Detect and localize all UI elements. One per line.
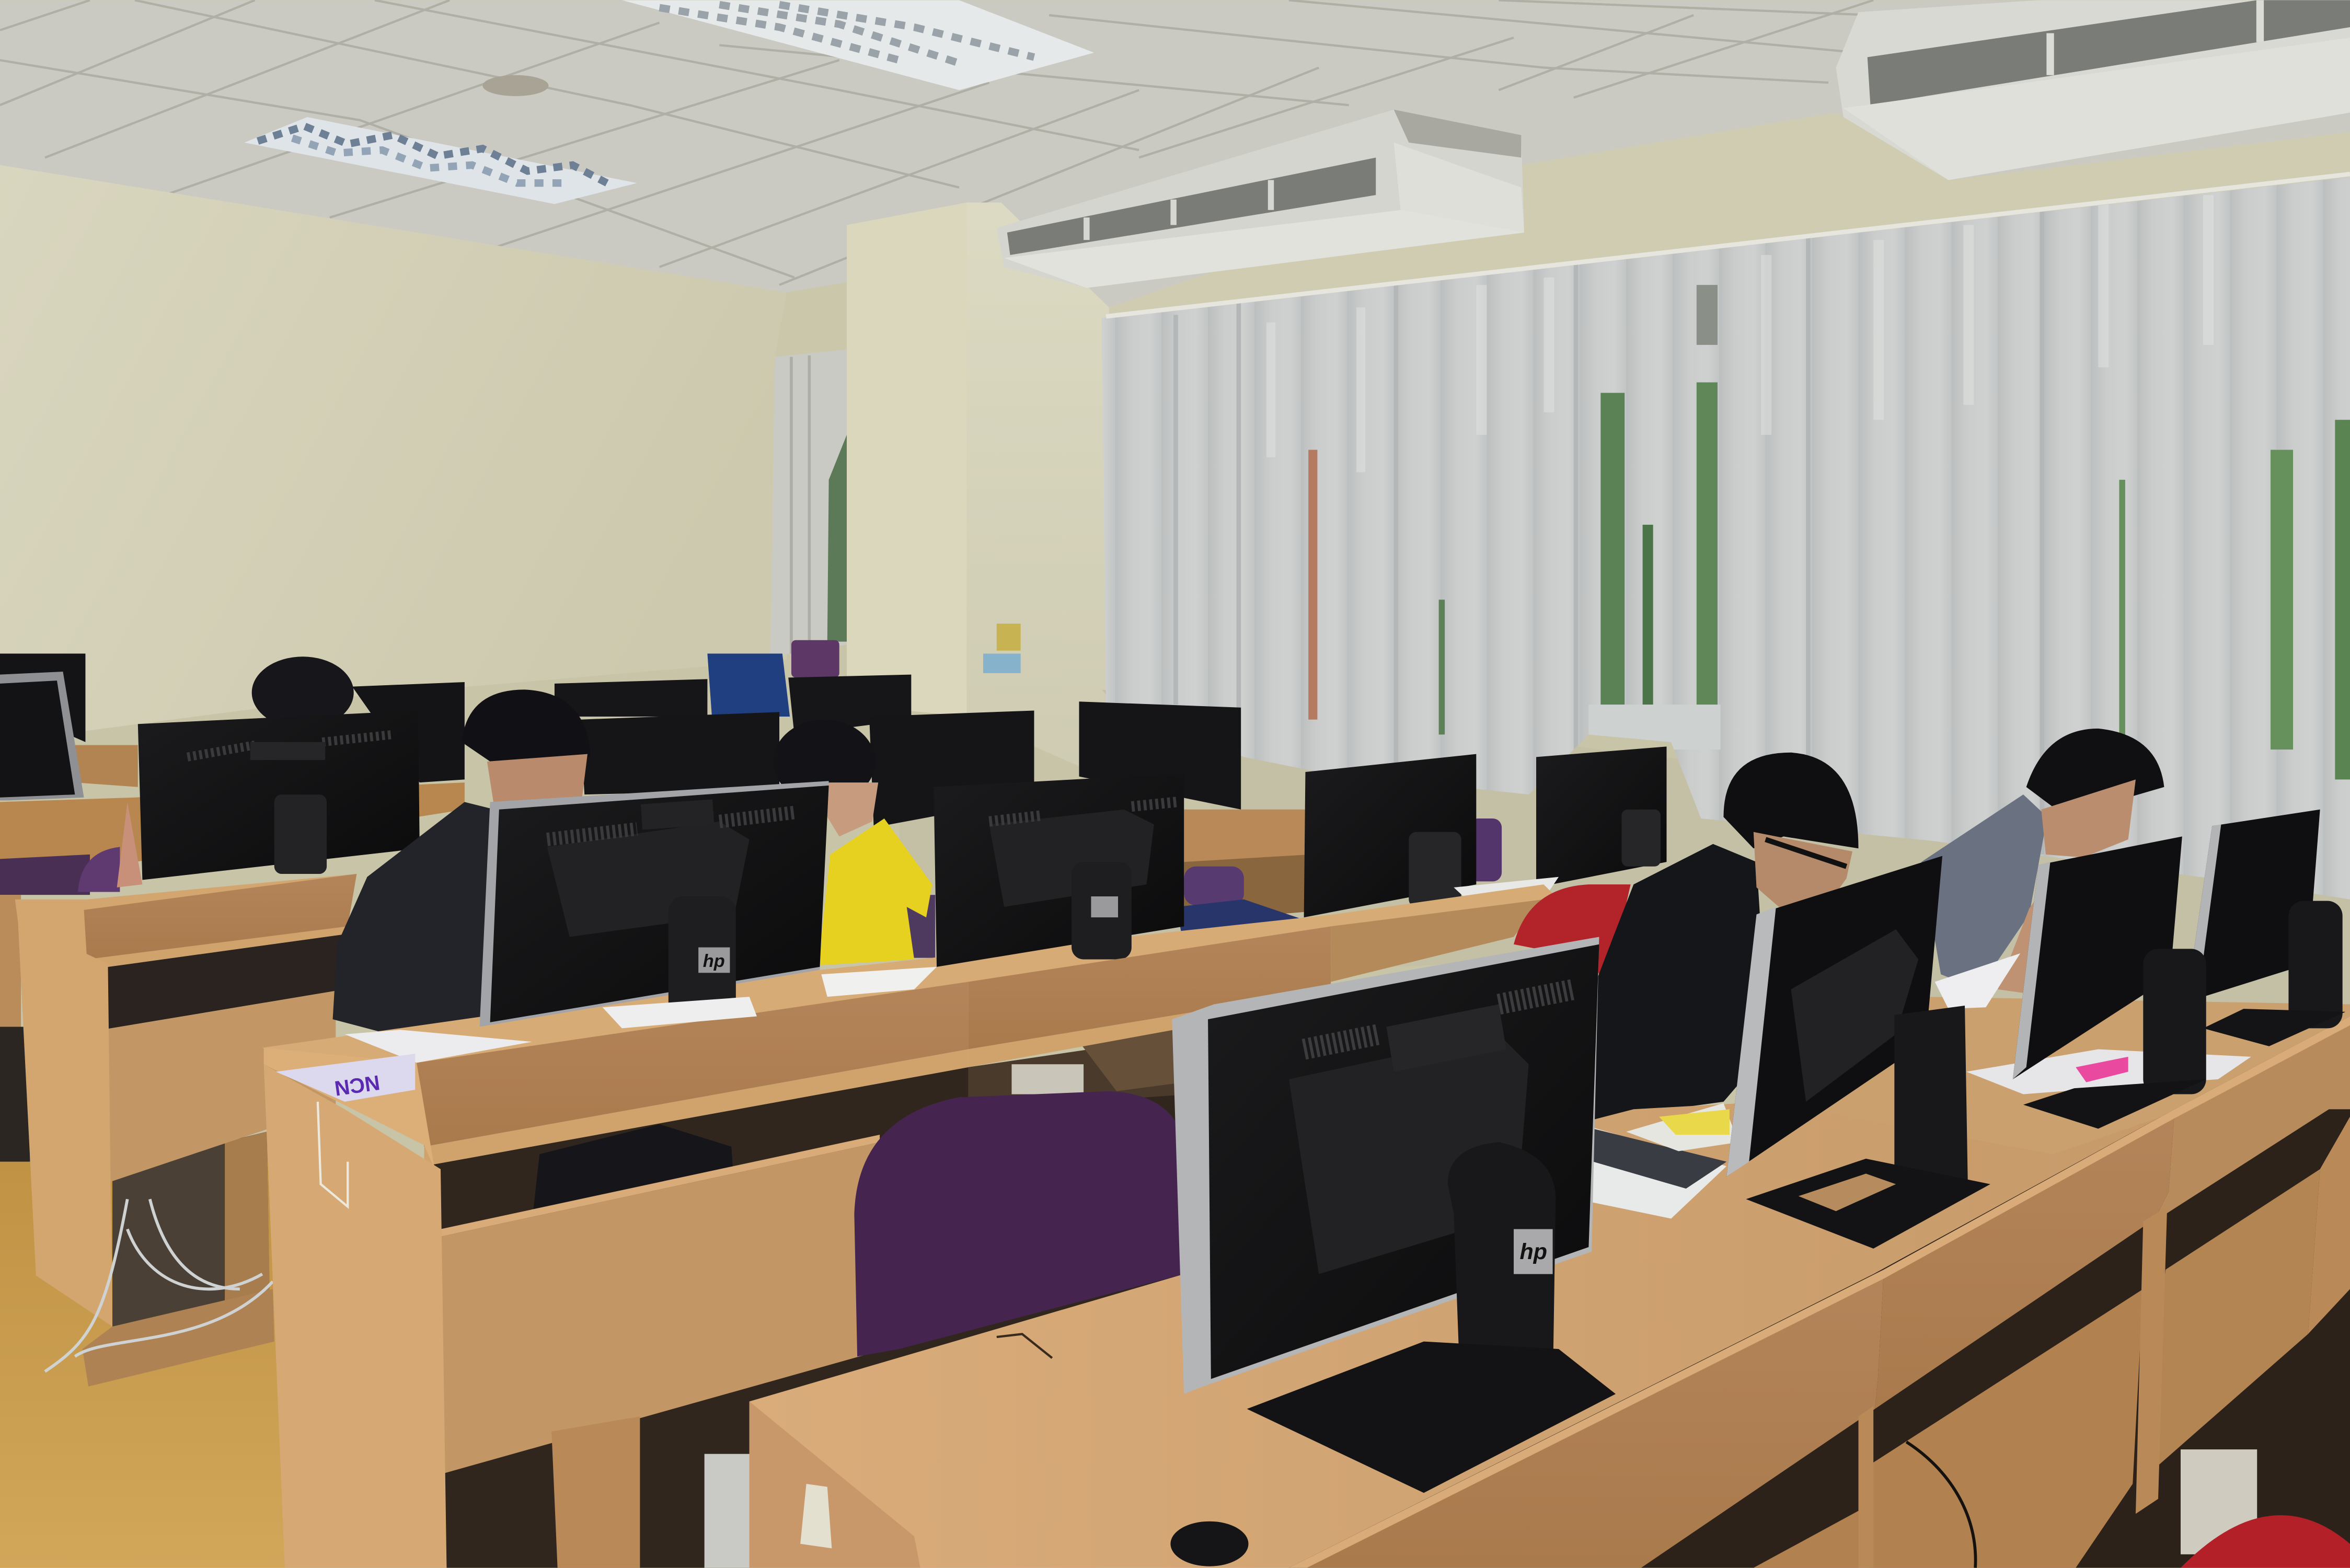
right monitor 3 <box>2013 836 2206 1128</box>
window blinds <box>1102 165 2350 914</box>
right monitor 4 <box>2194 810 2345 1046</box>
paper documents on front desk <box>1576 953 2251 1219</box>
large front monitor <box>1172 937 1616 1493</box>
back desk row <box>0 745 1311 1162</box>
second row desk top <box>262 884 1559 1082</box>
papers on second row: NCN <box>333 1070 381 1100</box>
front desk panels <box>750 1016 2350 1568</box>
curtain rail <box>1106 174 2350 316</box>
air conditioner right <box>1836 0 2350 180</box>
right monitor 2 <box>1726 856 1990 1249</box>
logo: hp: hp <box>703 951 725 971</box>
ceiling light top <box>622 0 1094 90</box>
man with glasses <box>1593 753 1859 1120</box>
ceiling <box>0 0 2350 315</box>
column <box>847 202 1109 779</box>
wall under blinds <box>1102 689 2350 1079</box>
monitors middle row back <box>1177 746 1666 948</box>
cables under third desk <box>45 1199 273 1371</box>
third desk row <box>15 874 356 1387</box>
man in grey shirt <box>1921 729 2164 994</box>
ceiling speaker <box>482 75 548 96</box>
upper right wall <box>1109 112 2350 318</box>
background person <box>117 656 354 887</box>
logo: hp <box>698 948 730 973</box>
ceiling light left <box>244 117 637 204</box>
man in black shirt at second row <box>333 689 607 1040</box>
mid background behind desks <box>899 810 1559 989</box>
monitors second row facing away <box>480 774 1184 1027</box>
cable grommet <box>997 1334 1248 1566</box>
papers on second row <box>276 967 937 1102</box>
purple chair front <box>854 1091 1187 1356</box>
floor <box>0 1139 307 1568</box>
front desk top <box>750 997 2350 1568</box>
back curtain <box>770 349 847 656</box>
person in yellow shirt <box>774 720 935 965</box>
monitor third row <box>138 711 420 880</box>
wall behind column <box>775 282 848 357</box>
second row desk panels <box>264 900 1543 1568</box>
red chair back <box>1514 884 1631 989</box>
window view: trees <box>1308 285 2350 779</box>
logo: hp front: hp <box>1519 1239 1547 1264</box>
air conditioner left <box>997 110 1524 288</box>
under second desk <box>424 1028 1199 1568</box>
back row monitors <box>0 654 1241 827</box>
logo: hp front <box>1514 1229 1553 1274</box>
left wall <box>0 165 787 742</box>
back chairs <box>707 640 839 717</box>
